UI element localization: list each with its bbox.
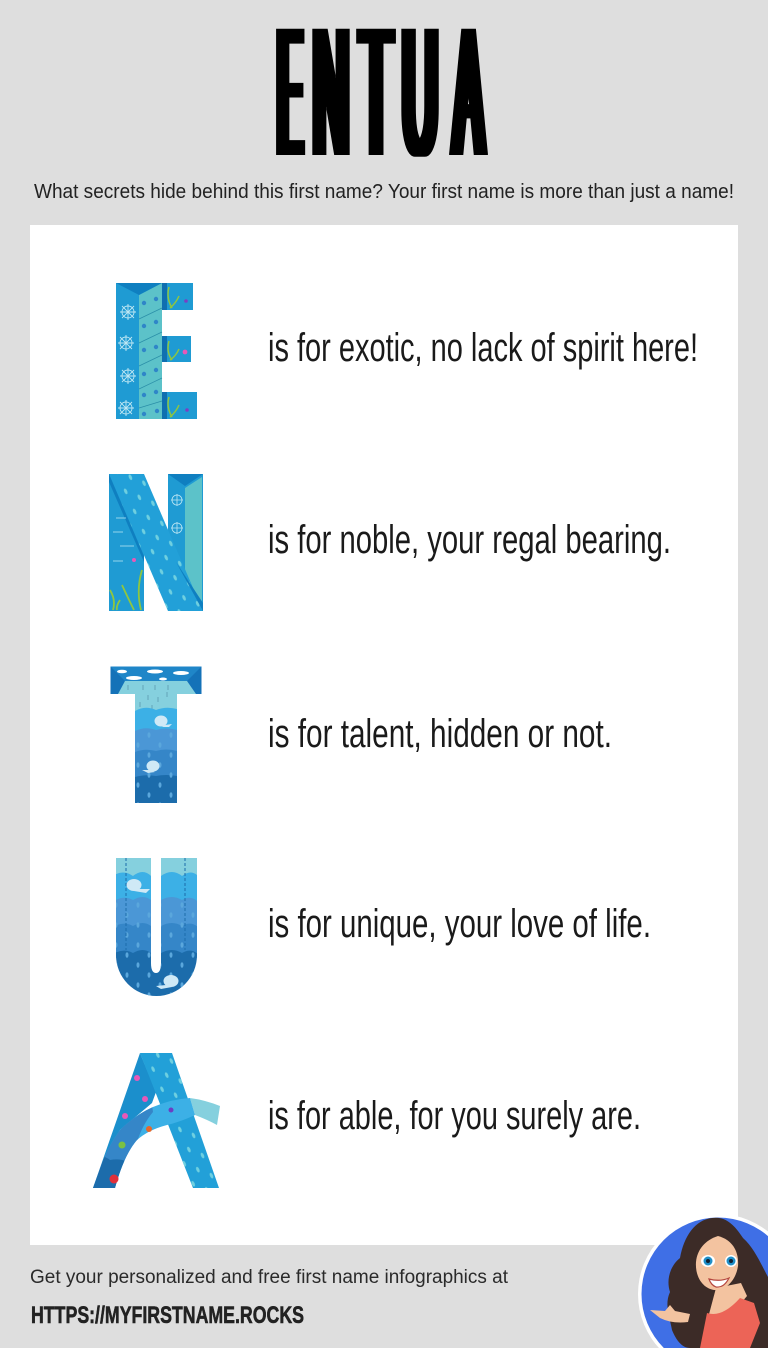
footer text: Get your personalized and free first name infographics at xyxy=(30,1267,509,1288)
mouth xyxy=(709,1278,729,1287)
footer url: HTTPS://MYFIRSTNAME.ROCKS xyxy=(31,1302,304,1329)
avatar xyxy=(638,1214,768,1348)
panel: letters xyxy=(30,225,738,1245)
shirt xyxy=(700,1298,760,1348)
eyes xyxy=(701,1255,737,1267)
text: T line: is for talent, hidden or not. xyxy=(268,712,612,756)
neck and shoulder xyxy=(708,1283,747,1318)
hair xyxy=(667,1218,768,1348)
subtitle: What secrets hide behind this first name? Your first name is more than just a name! xyxy=(34,181,734,203)
title xyxy=(278,0,483,194)
hand xyxy=(650,1305,690,1322)
icon: letter E xyxy=(116,283,197,419)
icon: letter T xyxy=(110,666,202,803)
face xyxy=(696,1236,738,1290)
icon: letter U xyxy=(116,858,197,996)
icon: letter A xyxy=(90,1053,220,1190)
icon: letter N xyxy=(109,474,203,611)
